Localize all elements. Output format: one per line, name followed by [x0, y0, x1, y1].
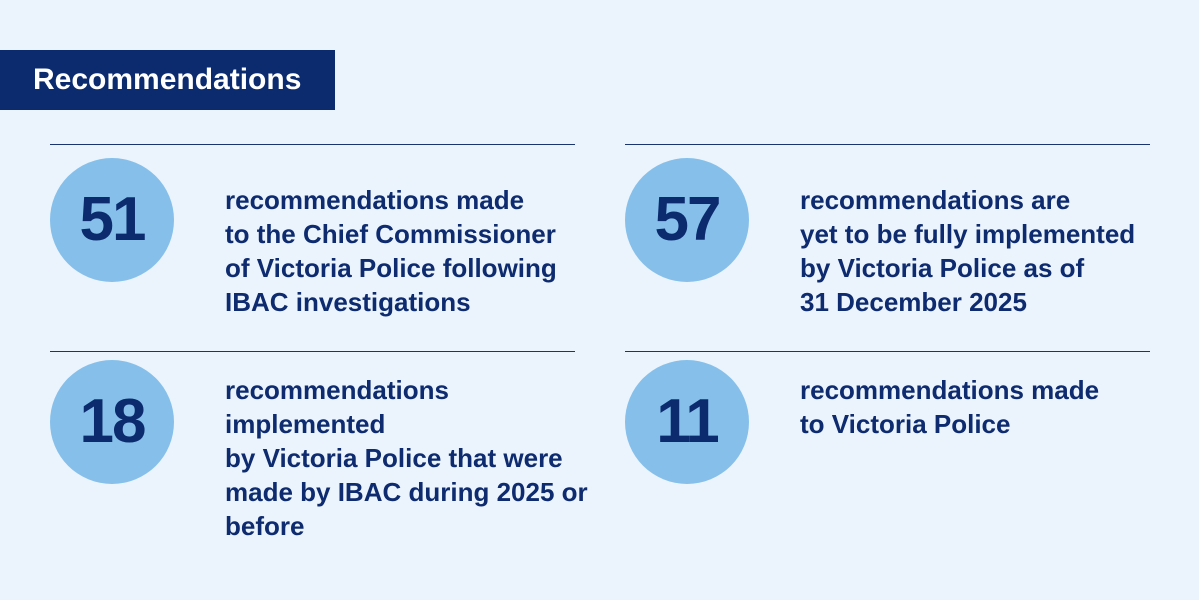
- stat circle: 57: [625, 158, 749, 282]
- text: 18: before: [225, 511, 304, 541]
- title: Recommendations: [33, 63, 301, 96]
- text: 11: to Victoria Police: [800, 409, 1010, 439]
- text: 11: recommendations made: [800, 375, 1099, 405]
- text: 57: recommendations are: [800, 185, 1070, 215]
- text: 57: yet to be fully implemented: [800, 219, 1135, 249]
- text: 18: recommendations: [225, 375, 449, 405]
- text: 11: [800, 375, 1099, 439]
- text: 57: [800, 185, 1135, 317]
- stat circle: 11: [625, 360, 749, 484]
- text: 51: [225, 185, 557, 317]
- text: 18: implemented: [225, 409, 385, 439]
- stat circle: 18: [50, 360, 174, 484]
- text: 18: made by IBAC during 2025 or: [225, 477, 588, 507]
- stat circle: 18: 18: [80, 387, 144, 456]
- text: 18: by Victoria Police that were: [225, 443, 563, 473]
- text: 51: of Victoria Police following: [225, 253, 557, 283]
- text: 51: IBAC investigations: [225, 287, 471, 317]
- text: 18: [225, 375, 588, 541]
- stat circle: 51: [50, 158, 174, 282]
- stat circle: 11: 11: [656, 387, 718, 456]
- stat circle: 51: 51: [80, 185, 144, 254]
- text: 51: to the Chief Commissioner: [225, 219, 556, 249]
- title: [0, 50, 335, 110]
- text: 57: 31 December 2025: [800, 287, 1027, 317]
- text: 57: by Victoria Police as of: [800, 253, 1084, 283]
- text: 51: recommendations made: [225, 185, 524, 215]
- stat circle: 57: 57: [655, 185, 719, 254]
